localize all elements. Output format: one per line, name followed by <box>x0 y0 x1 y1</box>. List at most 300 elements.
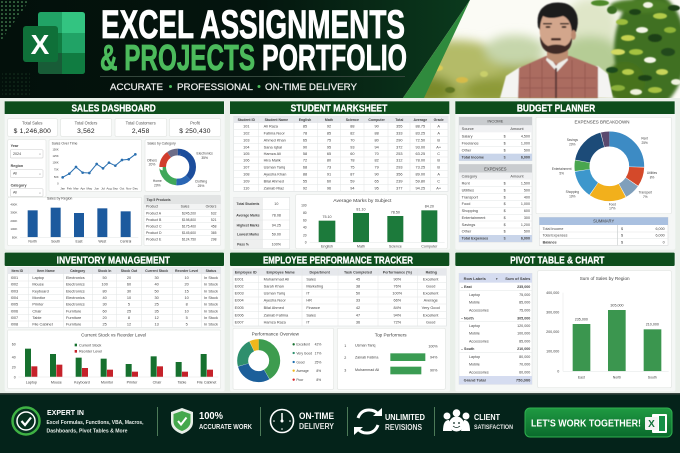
table: summary: SUMMARY <box>593 219 614 224</box>
donut chart: expenses breakdown: 5% <box>559 171 564 175</box>
table: employees: E004 <box>235 299 244 303</box>
table: top 5 products: Product <box>146 205 158 209</box>
pivot table: 75,000 <box>519 309 530 313</box>
table: employees: 36 <box>356 320 360 324</box>
text: 100% accurate work <box>199 411 252 431</box>
table: income: Total Income <box>462 155 484 159</box>
table: employees: Performance (%) <box>383 271 413 275</box>
bar chart: top performers <box>337 328 445 389</box>
panel: budget planner <box>455 101 675 250</box>
table: inventory: 12 <box>155 316 159 320</box>
table: employees: Good <box>426 285 435 289</box>
donut chart: sales by category: Clothing <box>195 180 207 184</box>
table: student marks: 80 <box>375 138 379 142</box>
table: student marks: 59 <box>350 179 354 183</box>
table: income: Amount <box>510 127 525 131</box>
donut chart: expenses breakdown: Food <box>609 202 616 206</box>
icon: revisions arrows <box>354 408 382 435</box>
table: employees: IT <box>306 320 310 324</box>
bar chart: current stock vs reorder level: 60 <box>12 342 16 346</box>
table: employees: 66% <box>393 299 402 303</box>
pivot table: Mobile <box>469 332 480 336</box>
donut chart: sales by category: 20% <box>149 163 155 167</box>
bar chart: sum of sales by region <box>538 271 671 388</box>
heading: student marksheet <box>230 101 449 114</box>
summary stats: Average Marks <box>236 213 260 217</box>
text: client satisfaction: SATISFACTION <box>474 425 513 431</box>
table: student marks: A <box>437 125 440 129</box>
table: student marks: 72 <box>303 159 307 163</box>
table: inventory: Electronics <box>66 283 85 287</box>
header photo background <box>403 0 680 98</box>
bar chart: current stock vs reorder level: 40 <box>12 355 16 359</box>
table: student marks: 377 <box>396 186 403 190</box>
bar chart: sales by region <box>8 196 142 246</box>
bar chart: sales by region: West <box>98 240 106 244</box>
table: student marks: 312 <box>396 159 403 163</box>
table: student marks: 107 <box>243 165 250 169</box>
pivot table: 750,000 <box>516 378 531 383</box>
table: expenses: 1,500 <box>521 181 530 185</box>
heading: employee performance tracker <box>230 253 449 266</box>
bar chart: current stock vs reorder level: Laptop <box>26 381 37 385</box>
table: employees: E002 <box>235 285 244 289</box>
bar chart: sum of sales by region: Sum of Sales by Region <box>580 276 630 281</box>
table: student marks: Ayesha Khan <box>264 172 286 176</box>
table: income: 4,500 <box>521 134 530 138</box>
table: top 5 products: Top 5 Products <box>147 198 171 202</box>
table: summary: 0 <box>663 240 665 244</box>
icon: small excel logo <box>645 414 667 433</box>
table: employees: Very Good <box>422 306 440 310</box>
line chart: sales over time: Aug <box>106 186 112 190</box>
table: top 5 products: $198,800 <box>182 218 196 222</box>
pivot table: Laptop <box>469 324 480 328</box>
bar chart: average marks by subject: English <box>321 245 333 249</box>
button: let's work together <box>525 408 672 437</box>
table: top 5 products: 521 <box>211 218 217 222</box>
table: inventory: Furniture <box>66 323 81 327</box>
table: student marks: Average <box>414 118 427 122</box>
table: employees: Bilal Ahmed <box>264 306 284 310</box>
table: expenses: $ <box>504 202 506 206</box>
table: inventory: I002 <box>11 283 18 287</box>
table: student marks: 93 <box>350 145 354 149</box>
table: inventory: 40 <box>155 283 159 287</box>
table: expenses: $ <box>504 181 506 185</box>
heading: inventory management <box>5 253 224 266</box>
text: client satisfaction: CLIENT <box>474 413 500 422</box>
pivot table: Laptop <box>469 355 480 359</box>
slicers <box>8 140 46 197</box>
table: student marks: Fatima Noor <box>264 132 285 136</box>
pivot table: – North <box>461 316 474 320</box>
slicers: 2024 <box>13 152 21 156</box>
slicers: ⌄ <box>38 190 42 194</box>
pivot table: – East <box>461 285 473 289</box>
text: on-time delivery: DELIVERY <box>299 422 335 431</box>
table: inventory: I007 <box>11 316 18 320</box>
table: income: $ <box>504 141 506 145</box>
table: expenses: Other <box>462 230 472 234</box>
table: employees: Good <box>426 320 435 324</box>
table: student marks: 92 <box>303 186 307 190</box>
line chart: sales over time: Nov <box>126 186 132 190</box>
table: top 5 products: 365 <box>211 231 217 235</box>
title: PORTFOLIO <box>262 37 407 78</box>
table: student marks: 372 <box>396 145 403 149</box>
donut chart: expenses breakdown: 17% <box>609 207 616 211</box>
table: inventory: I001 <box>11 276 18 280</box>
table: expenses: Utilities <box>462 188 474 192</box>
table: summary: 6,000 <box>656 227 665 231</box>
table: expenses: Entertainment <box>462 216 486 220</box>
table: student marks: 88 <box>350 125 354 129</box>
table: student marks: 78 <box>350 159 354 163</box>
line chart: sales over time: May <box>87 186 93 190</box>
bar chart: top performers: 3 <box>344 369 346 373</box>
line chart: sales over time: 0 <box>57 182 59 186</box>
panel: inventory management <box>5 253 225 391</box>
table: inventory: 5 <box>128 302 130 306</box>
table: student marks: 333 <box>396 132 403 136</box>
pivot table: ▾ <box>496 277 498 281</box>
table: inventory: 12 <box>127 323 131 327</box>
table: student marks: Grade <box>434 118 444 122</box>
pivot table: 85,000 <box>519 301 530 305</box>
table: inventory: I006 <box>11 309 18 313</box>
table: employees: 100% <box>392 292 403 296</box>
table: inventory: 40 <box>103 296 107 300</box>
slicers: ⌄ <box>38 152 42 156</box>
table: inventory: 60 <box>127 283 131 287</box>
table: top 5 products: 458 <box>211 224 217 228</box>
bar chart: current stock vs reorder level: Current Stock vs Reorder Level <box>81 332 146 337</box>
table: inventory: In Stock <box>204 323 218 327</box>
donut chart: sales by category: 20% <box>154 183 161 187</box>
table: summary: Total Income <box>543 227 563 231</box>
table: expenses: EXPENSES <box>484 166 507 171</box>
table: expenses: 1,200 <box>521 223 530 227</box>
bar chart: sum of sales by region: 210,000 <box>646 323 659 327</box>
bar chart: sales by region: 400K <box>10 203 17 207</box>
table: expenses: Transport <box>462 195 479 199</box>
donut chart: expenses breakdown: Entertainment <box>552 167 572 171</box>
table: inventory: Table <box>32 316 41 320</box>
table: employees: Hamza Raza <box>264 320 287 324</box>
table: student marks: Student Name <box>265 118 288 122</box>
table: top 5 products: 632 <box>211 211 217 215</box>
table: income: $ <box>504 155 506 159</box>
table: student marks: 65 <box>303 138 307 142</box>
table: inventory: 20 <box>127 276 131 280</box>
table: student marks: Bilal Ahmed <box>264 179 284 183</box>
pivot table: 120,000 <box>517 324 530 328</box>
table: income: Freelance <box>462 141 479 145</box>
table: expenses: Food <box>462 202 470 206</box>
table: student marks: 89.00 <box>416 172 425 176</box>
table: student marks: 94.25 <box>416 186 425 190</box>
donut chart: expenses breakdown: Shopping <box>566 190 579 194</box>
pivot table: 80,000 <box>519 355 530 359</box>
table: inventory: 20 <box>103 316 107 320</box>
text: unlimited revisions: REVISIONS <box>385 423 422 432</box>
footer strip <box>0 393 680 453</box>
donut chart: expenses breakdown: 25% <box>642 141 648 145</box>
summary stats <box>234 197 290 249</box>
pivot table: Mobile <box>469 301 480 305</box>
table: inventory: Electronics <box>66 289 85 293</box>
table: inventory: Furniture <box>66 309 81 313</box>
table: student marks: 82 <box>350 132 354 136</box>
line chart: sales over time: Jun <box>94 186 99 190</box>
bar chart: top performers: 1 <box>344 344 346 348</box>
table: employees: Employee Name <box>267 271 295 275</box>
table: top 5 products: $145,600 <box>182 231 196 235</box>
summary stats: Lowest Marks <box>237 233 259 237</box>
bar chart: current stock vs reorder level: 0 <box>14 375 16 379</box>
slicers: Region <box>11 164 23 168</box>
table: student marks: 59.80 <box>416 179 425 183</box>
line chart: sales over time: Sales Over Time <box>52 141 77 145</box>
pivot table: 100,000 <box>517 332 530 336</box>
table: inventory: 20 <box>185 283 189 287</box>
table: student marks: 239 <box>396 179 403 183</box>
table: summary: $ <box>621 240 623 244</box>
donut chart: expenses breakdown <box>536 117 671 214</box>
bar chart: sum of sales by region: 300,000 <box>546 311 559 315</box>
table: student marks: Hamza Ali <box>264 152 281 156</box>
line chart: sales over time: 125K <box>52 154 59 158</box>
table: income: Source <box>462 127 474 131</box>
legend: Reorder Level <box>79 350 102 354</box>
bar chart: average marks by subject: 0 <box>305 241 307 245</box>
pivot table: 70,000 <box>519 363 530 367</box>
pivot table: Accessories <box>469 370 489 374</box>
table: student marks: B <box>437 159 440 163</box>
text: on-time delivery <box>299 411 335 431</box>
bar chart: sum of sales by region: 305,000 <box>610 303 624 307</box>
table: summary: $ <box>621 227 623 231</box>
donut chart: expenses breakdown: Utilities <box>647 171 658 175</box>
line chart: sales over time: Apr <box>80 186 85 190</box>
table: expenses: $ <box>504 188 506 192</box>
table: employees: Usman Tariq <box>264 292 285 296</box>
donut chart: sales by category: 25% <box>198 184 204 188</box>
bar chart: sales by region: South <box>51 240 60 244</box>
bar chart: average marks by subject: 75.10 <box>322 215 332 219</box>
table: top 5 products: 298 <box>211 237 217 241</box>
table: inventory: 8 <box>128 316 130 320</box>
summary stats: 100% <box>272 242 282 246</box>
bar chart: sales by region: 200K <box>10 219 17 223</box>
table: inventory: Chair <box>32 309 42 313</box>
table: employees: Excellent <box>423 277 439 281</box>
table: expenses: Savings <box>462 223 475 227</box>
table: student marks: 88.75 <box>416 125 425 129</box>
table: student marks: 90 <box>375 172 379 176</box>
bar chart: current stock vs reorder level: Keyboard <box>74 381 90 385</box>
icon: excel logo: X <box>31 29 50 60</box>
bar chart: average marks by subject: 40 <box>303 226 307 230</box>
table: summary <box>539 217 668 245</box>
slicers: All <box>13 172 17 176</box>
text: unlimited revisions <box>385 413 425 432</box>
icon: check badge <box>12 408 40 434</box>
text: expert in: Excel Formulas, Functions, VBA, Macros, <box>46 420 144 426</box>
table: income: 1,000 <box>521 141 530 145</box>
table: income: INCOME <box>487 119 504 124</box>
legend: 8% <box>316 369 321 373</box>
summary stats: Highest Marks <box>237 223 260 227</box>
table: top 5 products: Product A <box>146 211 162 215</box>
table: employees: 90% <box>393 277 402 281</box>
table: summary: $ <box>621 234 623 238</box>
table: expenses: Total Expenses <box>462 237 488 241</box>
KPI cards: 3,562 <box>77 128 95 135</box>
bar chart: top performers: 100% <box>428 344 438 348</box>
table: employees: Rating <box>426 271 437 275</box>
summary stats: 94.25 <box>272 223 281 227</box>
summary stats: 59.00 <box>272 233 281 237</box>
table: employees: 50 <box>356 292 360 296</box>
table: student marks: 94 <box>350 186 355 190</box>
table: student marks: 88 <box>375 132 379 136</box>
table: student marks: 78.00 <box>416 159 425 163</box>
donut chart: expenses breakdown: 20% <box>569 142 576 146</box>
table: student marks: 82 <box>375 159 379 163</box>
table: student marks: 95 <box>327 145 331 149</box>
table: student marks: 85 <box>327 132 331 136</box>
donut chart: sales by category <box>145 140 221 191</box>
table: student marks: 60 <box>327 179 331 183</box>
table: student marks: 104 <box>243 145 250 149</box>
table: student marks: A <box>437 132 440 136</box>
table: student marks: 90 <box>375 125 379 129</box>
bar chart: sum of sales by region: North <box>613 376 621 380</box>
bar chart: average marks by subject: Average Marks by Subject <box>333 198 392 204</box>
bar chart: average marks by subject: 78.50 <box>391 210 400 214</box>
bar chart: top performers: 2 <box>344 356 346 360</box>
table: inventory: 25 <box>103 323 107 327</box>
table: employees: IT <box>306 292 310 296</box>
table: student marks: A+ <box>436 186 442 190</box>
table: student marks: 355 <box>396 125 403 129</box>
table: inventory: In Stock <box>204 309 218 313</box>
table: inventory: 35 <box>155 309 159 313</box>
table: student marks: 70 <box>350 138 354 142</box>
table: inventory: 10 <box>185 296 189 300</box>
table: employees: 38 <box>356 285 360 289</box>
legend: 42% <box>315 343 321 347</box>
table: student marks: Ali Raza <box>264 125 279 129</box>
table: student marks: English <box>299 118 311 122</box>
table: inventory: 30 <box>103 302 107 306</box>
table: expenses: 1,000 <box>521 202 530 206</box>
table: student marks: Total <box>395 118 403 122</box>
bar chart: sum of sales by region: South <box>648 376 657 380</box>
table: inventory: Keyboard <box>32 289 49 293</box>
table: student marks: 96 <box>327 186 331 190</box>
legend: 8% <box>316 378 321 382</box>
table: inventory: Electronics <box>66 302 85 306</box>
table: student marks: 110 <box>243 186 249 190</box>
line chart: sales over time: 100K <box>52 161 59 165</box>
table: employees: Task Completed <box>344 271 372 275</box>
table: student marks: 290 <box>396 138 403 142</box>
donut chart: performance overview: Performance Overview <box>252 332 300 337</box>
legend: Average <box>296 369 309 373</box>
bar chart: current stock vs reorder level: Mouse <box>51 381 62 385</box>
text: expert in <box>46 408 144 434</box>
bar chart: sum of sales by region: 400,000 <box>546 291 559 295</box>
table: employees: Marketing <box>306 285 323 289</box>
legend: 17% <box>315 351 321 355</box>
bar chart: current stock vs reorder level: Printer <box>127 381 138 385</box>
table: employees: Sarah Khan <box>264 285 284 289</box>
table: inventory <box>8 267 221 327</box>
bar chart: average marks by subject: Math <box>357 245 365 249</box>
table: inventory: Item Name <box>37 269 55 273</box>
table: student marks: A+ <box>436 145 442 149</box>
table: inventory: 50 <box>155 289 159 293</box>
table: employees: E006 <box>235 313 244 317</box>
bar chart: average marks by subject: 20 <box>303 233 307 237</box>
pivot table: Accessories <box>469 309 489 313</box>
table: inventory: File Cabinet <box>32 323 54 327</box>
table: employees: Excellent <box>423 292 439 296</box>
icon: excel logo <box>23 12 85 74</box>
table: inventory: Stock In <box>98 269 111 273</box>
slicers: Year <box>11 144 19 148</box>
table: top 5 products: $175,400 <box>182 224 196 228</box>
table: employees: 94% <box>393 313 402 317</box>
table: employees: Average <box>424 299 438 303</box>
line chart: sales over time: Dec <box>133 186 138 190</box>
table: expenses: 500 <box>524 188 530 192</box>
table: income: $ <box>504 134 506 138</box>
table: inventory: Furniture <box>66 316 81 320</box>
table: expenses: 300 <box>524 216 530 220</box>
table: student marks: 73 <box>327 165 331 169</box>
table: expenses: $ <box>504 195 506 199</box>
donut chart: sales by category: Others <box>147 158 157 162</box>
table: student marks: 356 <box>396 172 403 176</box>
table: top 5 products <box>144 195 221 245</box>
table: student marks: C <box>437 152 440 156</box>
table: employees: 84% <box>393 306 402 310</box>
pivot table: Sum of Sales <box>505 276 531 281</box>
table: student marks: 78 <box>303 132 307 136</box>
table: student marks <box>234 116 448 191</box>
table: expenses: $ <box>504 223 506 227</box>
bar chart: average marks by subject: 60 <box>303 218 307 222</box>
heading: sales dashboard: SALES DASHBOARD <box>71 103 156 114</box>
pivot table: Laptop <box>469 293 480 297</box>
table: income: 6,000 <box>521 155 530 159</box>
table: student marks: 65 <box>375 179 379 183</box>
heading: student marksheet: STUDENT MARKSHEET <box>291 103 387 114</box>
table: inventory: 50 <box>103 276 107 280</box>
heading: sales dashboard <box>5 101 224 114</box>
panel: employee performance tracker <box>230 253 450 391</box>
title: & PROJECTS <box>100 37 255 78</box>
table: top 5 products: Product E <box>146 237 162 241</box>
table: top 5 products: Sales <box>181 205 190 209</box>
icon: shield <box>171 408 193 434</box>
table: inventory: I008 <box>11 323 18 327</box>
heading: pivot table and chart: PIVOT TABLE & CHART <box>510 255 605 266</box>
